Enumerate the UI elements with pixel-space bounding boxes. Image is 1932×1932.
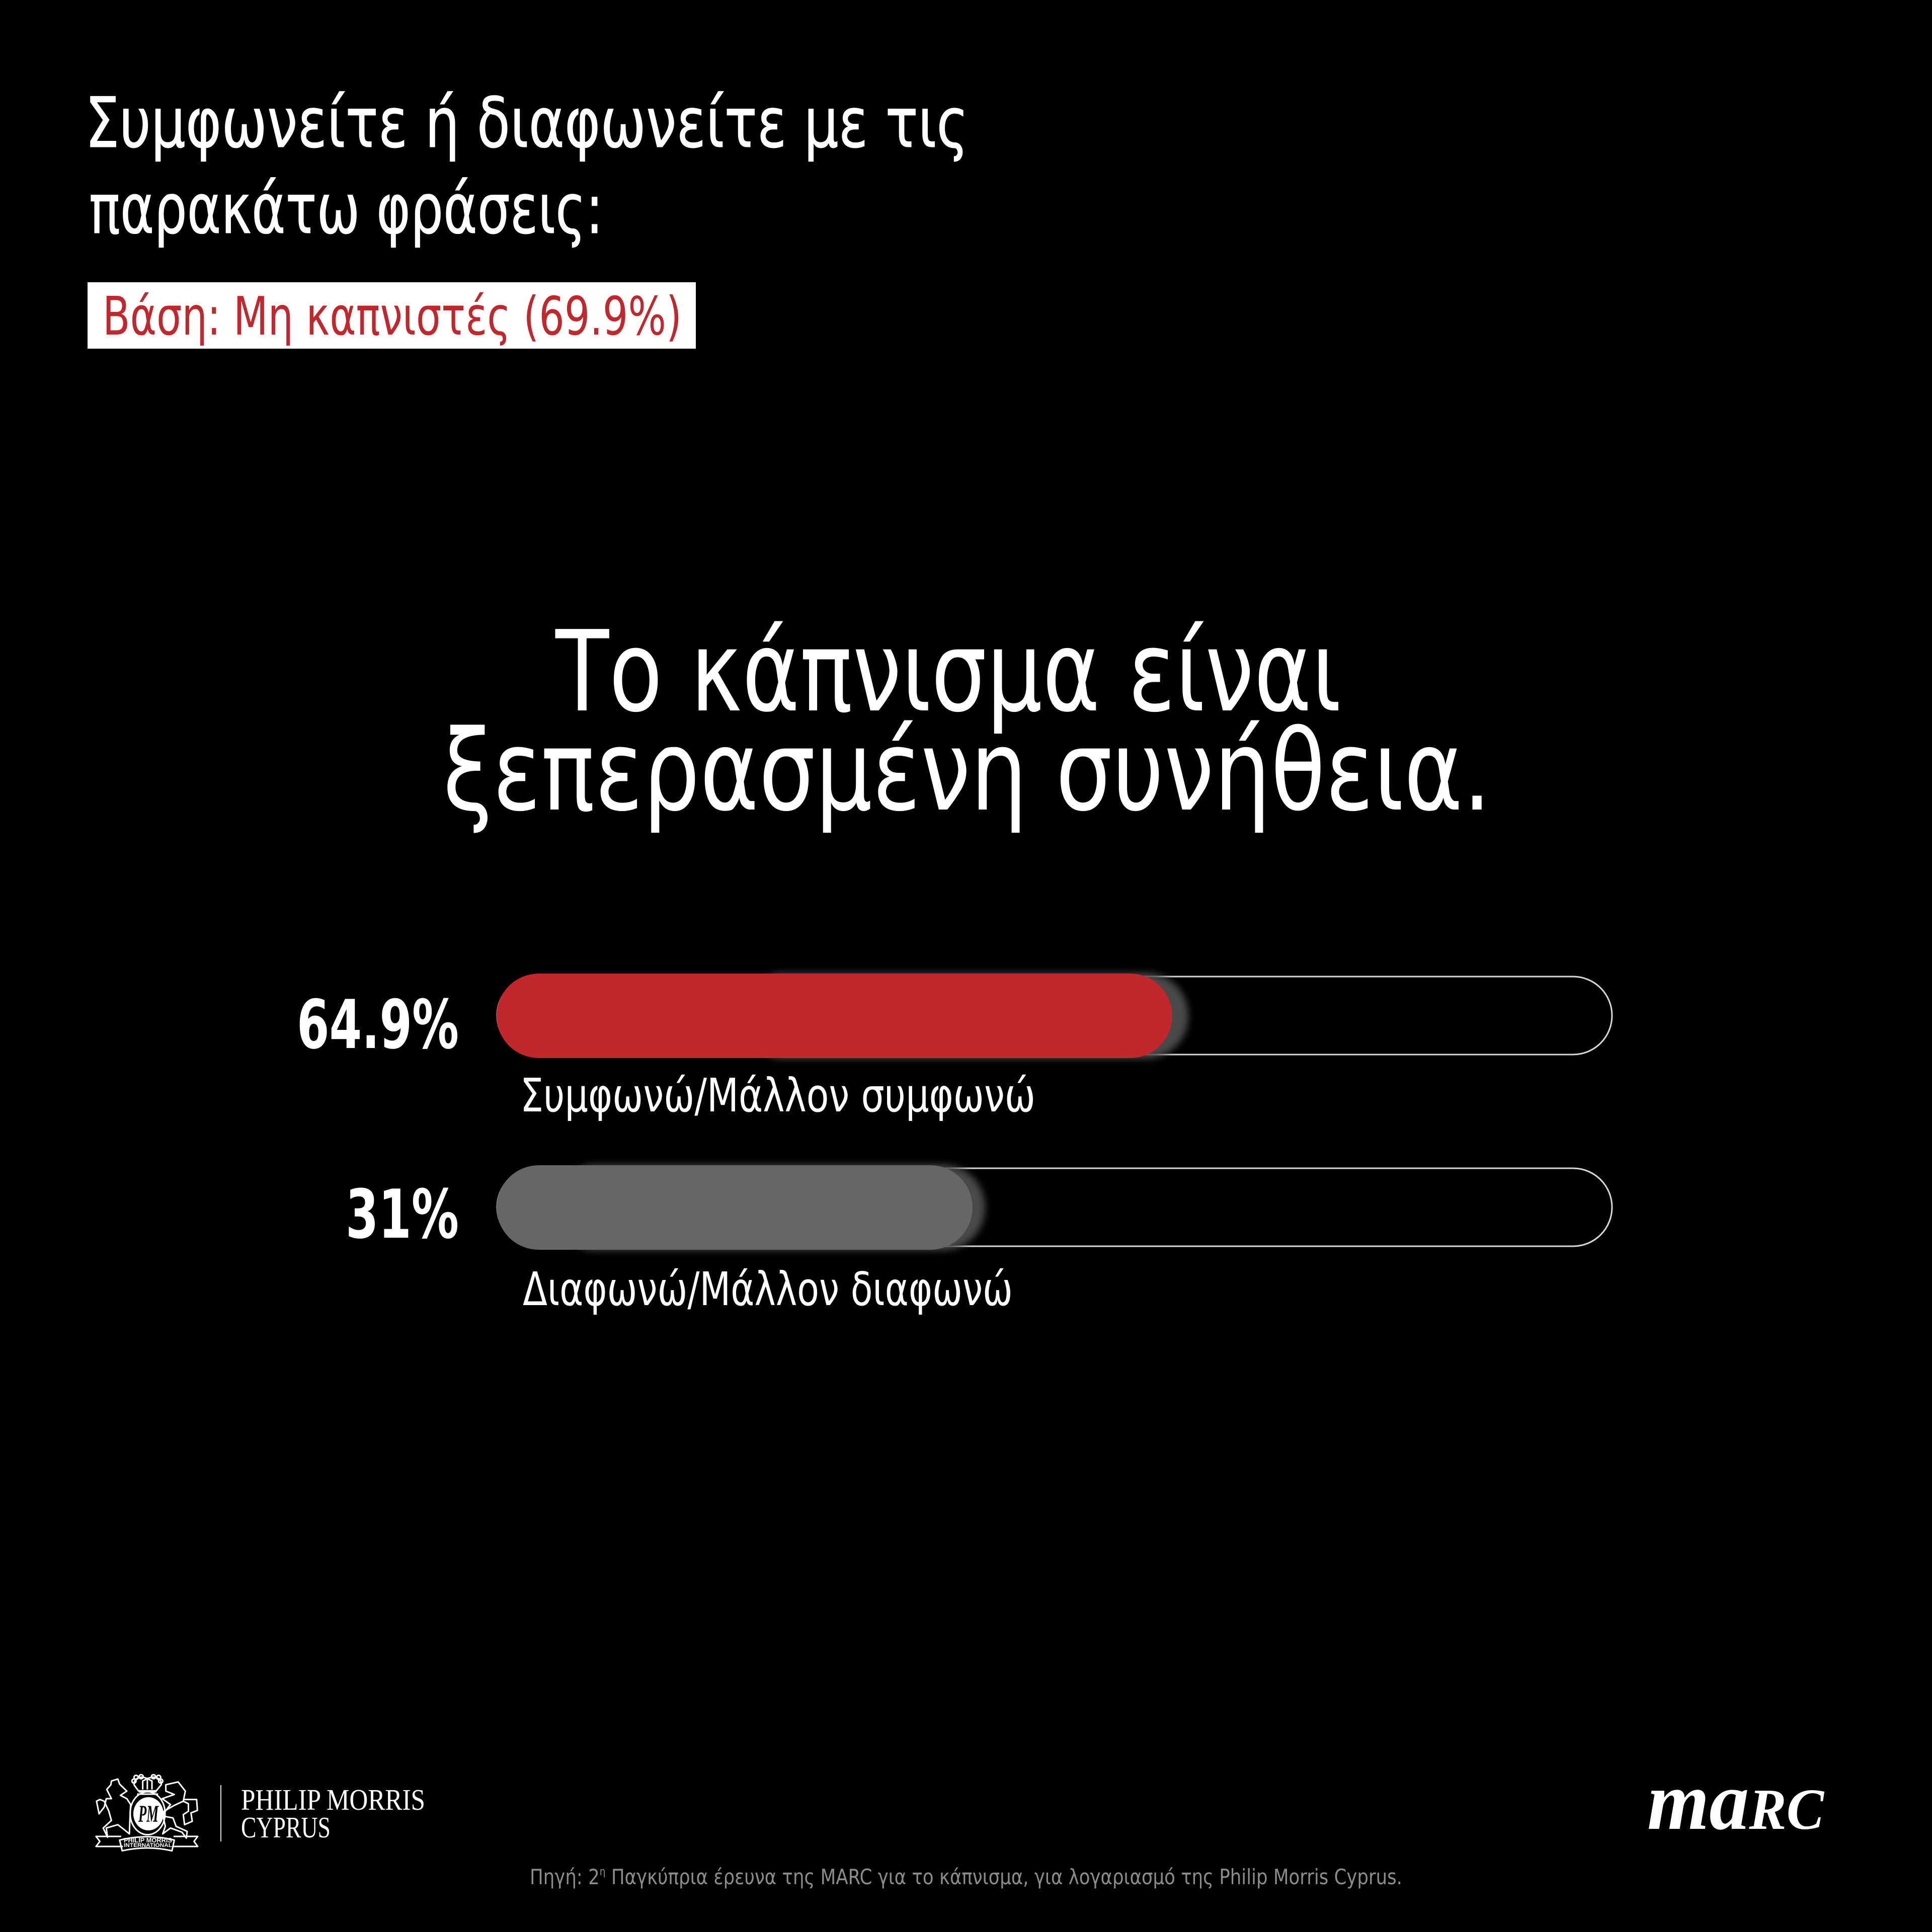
bar shadow: agree xyxy=(741,973,1188,1059)
source note: Πηγή: 2 xyxy=(530,1865,612,1889)
ribbon text: INTERNATIONAL xyxy=(124,1842,172,1848)
lion supporter xyxy=(162,1782,187,1838)
label: agree: Συμφωνώ/Μάλλον συμφωνώ xyxy=(520,1069,1035,1122)
horse supporter xyxy=(97,1779,131,1837)
monogram: PM xyxy=(138,1801,159,1827)
value: 64.9%: 64.9% xyxy=(297,986,459,1064)
bar fill: agree xyxy=(497,974,1172,1058)
ribbon xyxy=(96,1836,198,1846)
main statement: Το κάπνισμα είναι xyxy=(555,607,1341,737)
question heading xyxy=(85,83,969,250)
bar fill: disagree xyxy=(497,1165,973,1250)
oval shield xyxy=(130,1792,165,1835)
question heading: παρακάτω φράσεις: xyxy=(89,169,603,250)
value: 31%: 31% xyxy=(346,1175,459,1254)
bar track: disagree xyxy=(497,1168,1612,1246)
main statement: ξεπερασμένη συνήθεια. xyxy=(443,706,1491,836)
logo wordmark: Philip Morris Cyprus: PHILIP MORRIS xyxy=(241,1783,425,1816)
bar row: agree xyxy=(297,973,1612,1122)
source note: Παγκύπρια έρευνα της MARC για το κάπνισμα, για λογαριασμό της Philip Morris Cyprus. xyxy=(606,1865,1402,1889)
ribbon text xyxy=(124,1836,172,1848)
bar row: disagree xyxy=(346,1165,1612,1316)
source note: η xyxy=(600,1866,606,1878)
bar track: agree xyxy=(497,977,1612,1055)
shield centre xyxy=(133,1797,164,1830)
crown xyxy=(132,1775,163,1794)
question heading: Συμφωνείτε ή διαφωνείτε με τις xyxy=(85,83,969,164)
bar shadow: disagree xyxy=(553,1165,985,1250)
label: disagree: Διαφωνώ/Μάλλον διαφωνώ xyxy=(523,1262,1013,1316)
logo divider xyxy=(220,1785,221,1841)
logo wordmark: Philip Morris Cyprus: CYPRUS xyxy=(241,1811,331,1844)
base label box: Βάση: Μη καπνιστές (69.9%) xyxy=(103,286,682,347)
logo: Philip Morris crest xyxy=(96,1775,198,1851)
ribbon text: PHILIP MORRIS xyxy=(124,1836,172,1844)
main statement xyxy=(443,607,1491,836)
logo wordmark: Philip Morris Cyprus xyxy=(241,1783,425,1844)
logo: MARC: maRC xyxy=(1647,1755,1825,1847)
